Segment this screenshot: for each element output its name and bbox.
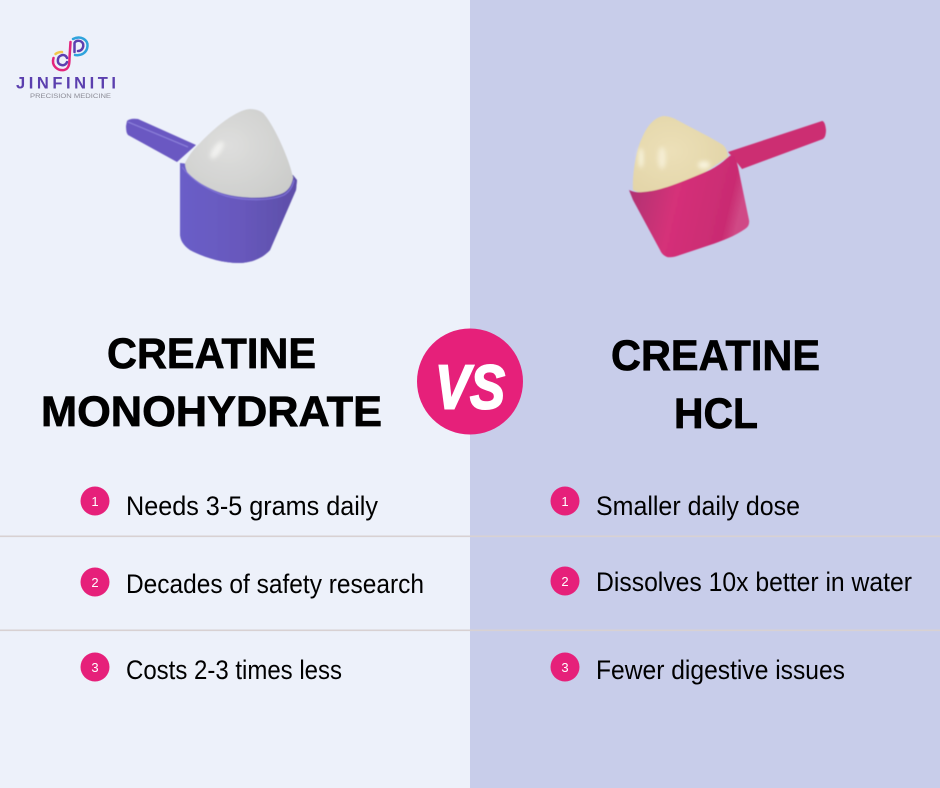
point 2: 2 [91, 575, 99, 590]
badge: VS [417, 328, 523, 434]
point 2: Dissolves 10x better in water [596, 567, 912, 597]
title: Creatine Monohydrate: MONOHYDRATE [41, 388, 382, 436]
logo wordmark: JINFINITI [16, 74, 116, 92]
badge: VS: VS [435, 354, 505, 422]
title: Creatine HCL: CREATINE [611, 332, 820, 380]
panel: left background [0, 0, 470, 788]
point 2: Decades of safety research [126, 569, 424, 599]
point 2: 2 [561, 574, 569, 589]
list: monohydrate points [80, 486, 424, 685]
point 3: Costs 2-3 times less [126, 655, 342, 685]
point 1 [550, 486, 800, 521]
point 1: 1 [91, 494, 99, 509]
point 1: Smaller daily dose [596, 491, 800, 521]
panel: right background [470, 0, 940, 788]
point 3: 3 [561, 660, 569, 675]
logo tagline: PRECISION MEDICINE [30, 93, 112, 100]
point 3 [80, 652, 342, 685]
title: Creatine HCL [611, 332, 820, 438]
point 1: 1 [561, 494, 569, 509]
logo: Jinfiniti [16, 38, 116, 100]
title: Creatine Monohydrate [41, 330, 382, 436]
title: Creatine HCL: HCL [674, 390, 758, 438]
point 3: 3 [91, 660, 99, 675]
icon: pink scoop with cream powder [629, 116, 826, 257]
list: HCL points [550, 486, 912, 685]
icon: logo infinity mark [53, 38, 88, 70]
title: Creatine Monohydrate: CREATINE [107, 330, 316, 378]
point 1: Needs 3-5 grams daily [126, 491, 378, 521]
point 3: Fewer digestive issues [596, 655, 845, 685]
icon: purple scoop with white powder [126, 109, 297, 263]
